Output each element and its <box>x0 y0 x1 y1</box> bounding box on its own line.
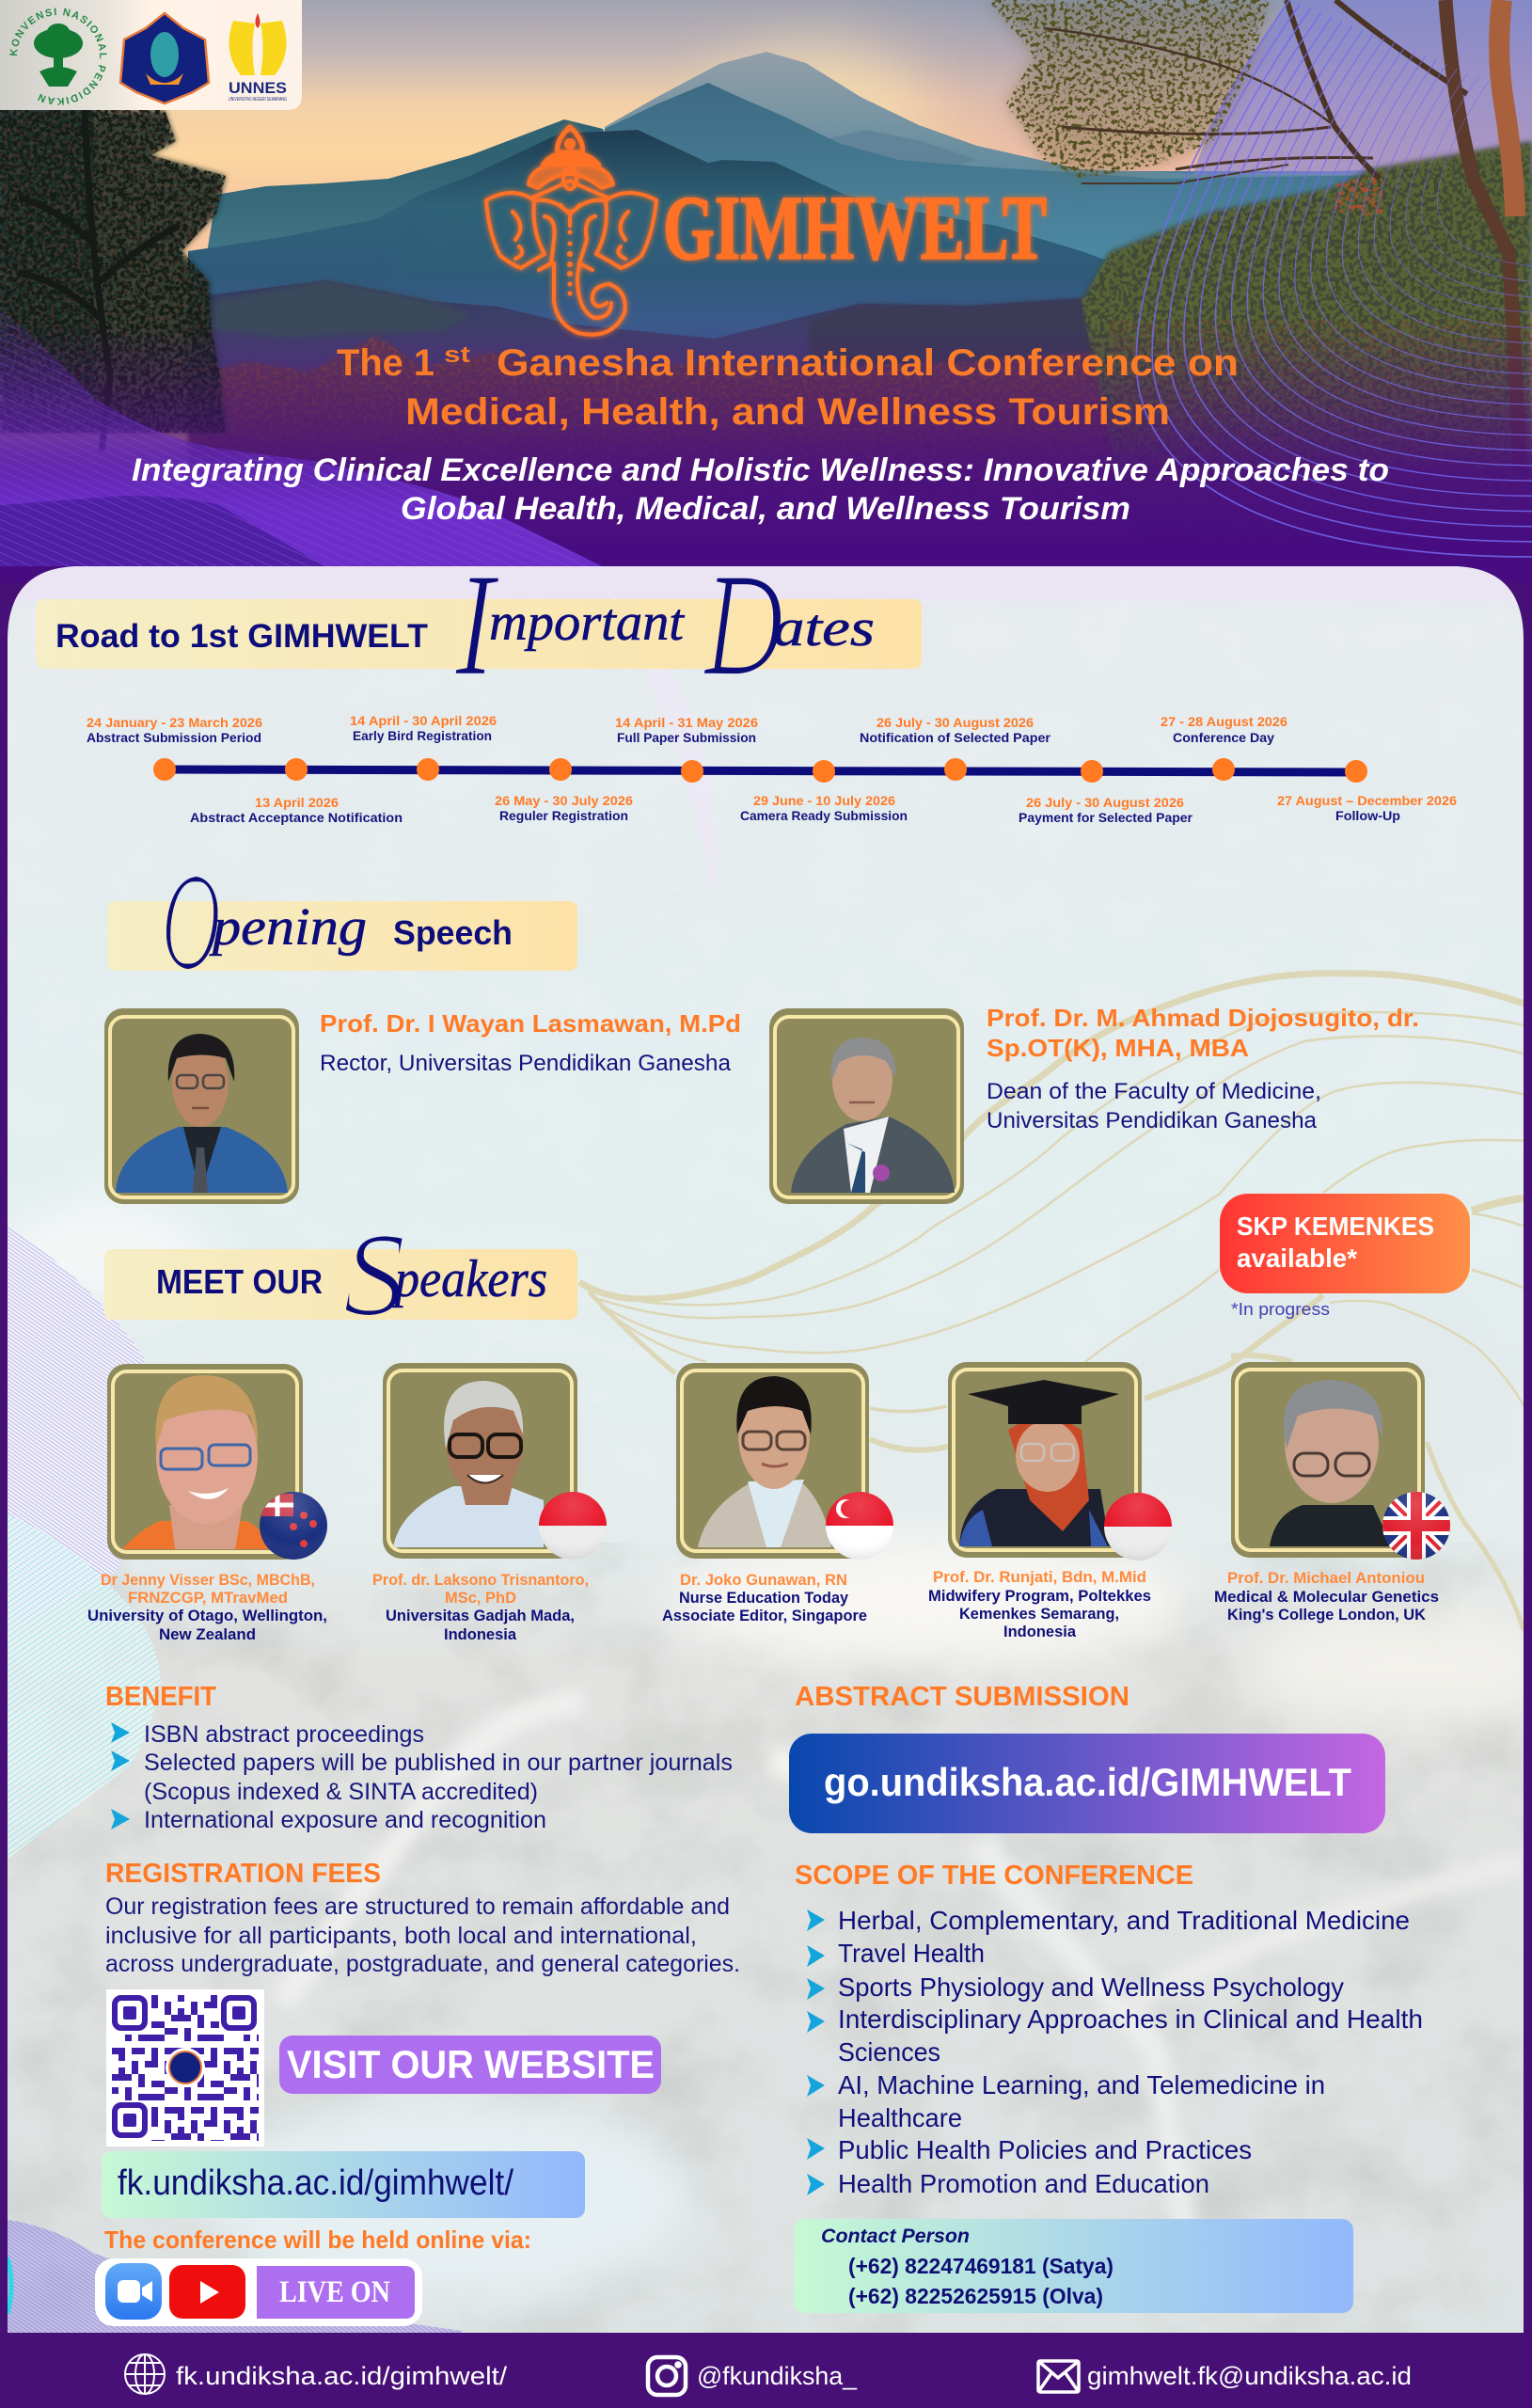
callout: SKP Kemenkes: SKP KEMENKES <box>1237 1212 1434 1241</box>
title: GIMHWELT: GIMHWELT <box>663 178 1047 278</box>
timeline: follow-up: Follow-Up <box>1335 808 1400 823</box>
timeline: follow-up <box>1277 793 1457 823</box>
text: Joko Gunawan: Nurse Education Today <box>679 1590 849 1607</box>
timeline: regular registration: 26 May - 30 July 2026 <box>495 793 633 808</box>
callout: SKP Kemenkes: available* <box>1237 1244 1357 1273</box>
banner: Important Dates heading <box>36 544 922 705</box>
timeline: full paper submission <box>615 715 758 745</box>
text: Michael Antoniou <box>1214 1570 1439 1624</box>
logos panel <box>0 0 302 110</box>
panel: benefit: ISBN abstract proceedings <box>144 1721 424 1748</box>
cyan line wave left <box>8 1514 161 1859</box>
text: Runjati: Kemenkes Semarang, <box>959 1606 1119 1623</box>
timeline: early bird registration <box>350 713 497 743</box>
heading: conference name: Medical, Health, and Wellness Tourism <box>405 391 1170 433</box>
banner: Important Dates heading: mportant <box>489 594 685 652</box>
timeline: abstract submission period <box>87 715 262 745</box>
QR code <box>106 1989 264 2147</box>
timeline: payment for selected paper <box>1019 795 1193 825</box>
banner: Opening Speech heading: pening <box>209 898 367 957</box>
banner: Important Dates heading: ates <box>773 599 875 657</box>
timeline: payment for selected paper: 26 July - 30 August 2026 <box>1026 795 1184 810</box>
icon: Indonesia flag <box>539 1492 607 1560</box>
timeline: abstract acceptance notification: Abstract Acceptance Notification <box>190 810 403 825</box>
banner: Opening Speech heading: O <box>160 845 222 998</box>
panel: benefit: International exposure and recognition <box>144 1807 546 1833</box>
timeline: abstract acceptance notification <box>190 795 403 825</box>
banner: Meet Our Speakers heading <box>104 1211 577 1340</box>
portrait: Jenny Visser with New Zealand flag <box>107 1364 327 1560</box>
timeline: payment for selected paper: Payment for Selected Paper <box>1019 810 1193 825</box>
footer: instagram <box>648 2357 858 2395</box>
timeline: follow-up: 27 August – December 2026 <box>1277 793 1457 808</box>
banner: Important Dates heading: Road to 1st GIMHWELT <box>55 618 428 655</box>
subtitle: conference theme: Integrating Clinical Excellence and Holistic Wellness: Innovative Approaches to <box>132 452 1389 488</box>
panel: scope of the conference: Interdisciplinary Approaches in Clinical and Health <box>838 2004 1423 2034</box>
banner: Meet Our Speakers heading: peakers <box>391 1250 547 1308</box>
pill: abstract submission URL <box>789 1734 1385 1833</box>
purple line wave left <box>8 1289 144 1580</box>
label: live on <box>257 2266 415 2319</box>
timeline: conference day: Conference Day <box>1173 730 1274 745</box>
timeline: camera ready submission: Camera Ready Submission <box>740 808 908 823</box>
panel: scope of the conference: Sciences <box>838 2037 940 2067</box>
subtitle: conference theme: Global Health, Medical, and Wellness Tourism <box>401 491 1130 527</box>
timeline: regular registration: Reguler Registration <box>499 808 628 823</box>
text: Dean name and role: Dean of the Faculty of Medicine, <box>987 1079 1321 1104</box>
footer: website: fk.undiksha.ac.id/gimhwelt/ <box>176 2362 508 2390</box>
icon: instagram <box>648 2357 686 2395</box>
heading: conference name: Ganesha International Conference on <box>497 342 1239 384</box>
right tree <box>1192 0 1532 175</box>
timeline <box>87 713 1457 825</box>
timeline: early bird registration: Early Bird Registration <box>353 728 492 743</box>
panel: scope of the conference: Health Promotion and Education <box>838 2169 1209 2198</box>
bottom-left line wave <box>8 2220 462 2333</box>
banner: Important Dates heading: I <box>453 544 500 705</box>
text: Jenny Visser: Dr Jenny Visser BSc, MBChB, <box>101 1572 315 1589</box>
portrait: Runjati with Indonesia flag <box>948 1362 1172 1560</box>
icon: Zoom <box>105 2263 162 2320</box>
panel: contact person: (+62) 82247469181 (Satya) <box>848 2254 1113 2278</box>
icon: UNNES logo: UNIVERSITAS NEGERI SEMARANG <box>229 97 287 103</box>
icon: Singapore flag <box>826 1492 893 1560</box>
text: Rector name and role: Prof. Dr. I Wayan Lasmawan, M.Pd <box>320 1009 741 1038</box>
panel: contact person <box>794 2219 1353 2313</box>
text: Runjati <box>928 1569 1151 1640</box>
text: Joko Gunawan <box>662 1572 867 1624</box>
aerial photo texture background <box>0 566 1532 2333</box>
text: Runjati: Indonesia <box>1003 1624 1077 1640</box>
banner: Opening Speech heading <box>107 845 577 998</box>
left purple wave <box>0 308 602 566</box>
timeline: notification of selected paper <box>860 715 1051 745</box>
text: Joko Gunawan: Associate Editor, Singapore <box>662 1608 867 1624</box>
banner: Opening Speech heading: Speech <box>393 913 513 952</box>
panel: contact person: (+62) 82252625915 (Olva) <box>848 2284 1103 2308</box>
timeline: conference day: 27 - 28 August 2026 <box>1161 714 1287 729</box>
panel: scope of the conference: AI, Machine Learning, and Telemedicine in <box>838 2070 1325 2099</box>
icon: New Zealand flag <box>260 1492 327 1560</box>
banner: Meet Our Speakers heading: S <box>342 1211 406 1340</box>
panel: scope of the conference <box>795 1861 1423 2198</box>
panel: benefit: (Scopus indexed & SINTA accredited) <box>144 1779 538 1805</box>
panel: benefit: BENEFIT <box>105 1682 216 1712</box>
pill: website URL: fk.undiksha.ac.id/gimhwelt/ <box>118 2163 513 2203</box>
banner: Meet Our Speakers heading: MEET OUR <box>156 1262 323 1301</box>
timeline: full paper submission: Full Paper Submission <box>617 730 756 745</box>
panel: scope of the conference: Public Health Policies and Practices <box>838 2135 1252 2164</box>
icon: UNNES logo <box>229 13 287 103</box>
heading: conference name: The 1 <box>337 342 434 384</box>
icon: national education tree logo: KONVENSI NASIONAL PENDIDIKAN <box>9 8 107 105</box>
subtitle: conference theme <box>132 452 1389 527</box>
text: Dean name and role: Prof. Dr. M. Ahmad Djojosugito, dr. <box>987 1004 1419 1032</box>
footer: instagram: @fkundiksha_ <box>697 2362 858 2390</box>
panel: contact person: Contact Person <box>821 2226 970 2247</box>
timeline: abstract submission period: Abstract Submission Period <box>87 730 261 745</box>
panel: registration fees: across undergraduate, postgraduate, and general categories. <box>105 1951 740 1977</box>
panel: scope of the conference: Herbal, Complementary, and Traditional Medicine <box>838 1906 1410 1935</box>
heading: conference name <box>337 342 1239 433</box>
label: live on: LIVE ON <box>279 2275 390 2309</box>
text: Jenny Visser: FRNZCGP, MTravMed <box>128 1590 288 1607</box>
text: Jenny Visser: University of Otago, Wellington, <box>87 1608 327 1624</box>
text: Dean name and role <box>987 1004 1419 1133</box>
panel: benefit: Selected papers will be published in our partner journals <box>144 1750 733 1776</box>
icon: YouTube <box>169 2265 245 2319</box>
icon: bullet arrows <box>807 1909 825 2195</box>
panel: registration fees: Our registration fees are structured to remain affordable and <box>105 1893 730 1920</box>
panel: live platforms <box>95 2258 422 2326</box>
text: Laksono Trisnantoro: Prof. dr. Laksono Trisnantoro, <box>372 1572 589 1589</box>
text: Jenny Visser: New Zealand <box>159 1626 256 1643</box>
panel: scope of the conference: SCOPE OF THE CONFERENCE <box>795 1861 1193 1891</box>
footer bar background <box>0 2333 1532 2408</box>
text: Michael Antoniou: Medical & Molecular Genetics <box>1214 1589 1439 1606</box>
panel: registration fees <box>105 1859 740 1977</box>
text: Laksono Trisnantoro: Indonesia <box>444 1626 517 1643</box>
button: visit our website: VISIT OUR WEBSITE <box>287 2042 655 2086</box>
portrait: Laksono Trisnantoro with Indonesia flag <box>383 1363 607 1560</box>
icon: globe <box>125 2354 165 2394</box>
timeline: full paper submission: 14 April - 31 May 2026 <box>615 715 758 730</box>
icon: UK flag <box>1382 1492 1450 1560</box>
text: Runjati: Prof. Dr. Runjati, Bdn, M.Mid <box>933 1569 1146 1586</box>
icon: bullet arrows <box>111 1722 130 1830</box>
gold ribbon curves <box>579 974 1532 1630</box>
panel: main content card <box>0 566 1532 2333</box>
panel: scope of the conference: Healthcare <box>838 2103 962 2132</box>
text: Rector name and role <box>320 1009 741 1076</box>
text: Runjati: Midwifery Program, Poltekkes <box>928 1588 1151 1605</box>
portrait: Joko Gunawan with Singapore flag <box>676 1363 893 1560</box>
icon: Ganesha logo <box>486 127 656 335</box>
text: Jenny Visser <box>87 1572 327 1643</box>
pill: abstract submission URL: go.undiksha.ac.id/GIMHWELT <box>824 1760 1351 1804</box>
left tree <box>0 110 94 395</box>
callout: SKP Kemenkes <box>1220 1194 1470 1293</box>
timeline: camera ready submission: 29 June - 10 July 2026 <box>753 793 895 808</box>
note: in progress: *In progress <box>1231 1300 1330 1319</box>
heading: abstract submission: ABSTRACT SUBMISSION <box>795 1682 1129 1712</box>
timeline: abstract acceptance notification: 13 April 2026 <box>255 795 339 810</box>
timeline: camera ready submission <box>740 793 908 823</box>
hero background: mountain landscape <box>0 0 1532 583</box>
text: Dean name and role: Universitas Pendidikan Ganesha <box>987 1108 1318 1133</box>
portrait: Dean <box>769 1008 964 1204</box>
footer: website <box>125 2354 508 2394</box>
panel: registration fees: inclusive for all participants, both local and international, <box>105 1923 697 1949</box>
timeline: conference day <box>1161 714 1287 745</box>
text: Joko Gunawan: Dr. Joko Gunawan, RN <box>680 1572 847 1589</box>
timeline: notification of selected paper: Notification of Selected Paper <box>860 730 1051 745</box>
text: Laksono Trisnantoro: Universitas Gadjah Mada, <box>386 1608 575 1624</box>
icon: UNNES logo: UNNES <box>229 79 287 97</box>
timeline: notification of selected paper: 26 July - 30 August 2026 <box>877 715 1034 730</box>
heading: conference name: st <box>444 342 470 368</box>
timeline: early bird registration: 14 April - 30 April 2026 <box>350 713 497 728</box>
panel: scope of the conference: Sports Physiology and Wellness Psychology <box>838 1972 1344 2002</box>
timeline: regular registration <box>495 793 633 823</box>
icon: Undiksha shield logo <box>120 13 209 103</box>
text: Rector name and role: Rector, Universitas Pendidikan Ganesha <box>320 1051 732 1076</box>
panel: scope of the conference: Travel Health <box>838 1939 985 1968</box>
panel: benefit <box>105 1682 733 1833</box>
banner: Important Dates heading: D <box>702 544 784 705</box>
panel: registration fees: REGISTRATION FEES <box>105 1859 381 1889</box>
text: online via: The conference will be held online via: <box>104 2226 531 2254</box>
text: Michael Antoniou: Prof. Dr. Michael Antoniou <box>1227 1570 1425 1587</box>
footer: email: gimhwelt.fk@undiksha.ac.id <box>1087 2362 1412 2390</box>
portrait: Michael Antoniou with UK flag <box>1231 1362 1450 1560</box>
text: Laksono Trisnantoro <box>372 1572 589 1643</box>
right concentric line wave <box>1136 0 1532 557</box>
icon: Indonesia flag <box>1104 1493 1172 1560</box>
pill: website URL <box>102 2151 585 2218</box>
timeline: abstract submission period: 24 January - 23 March 2026 <box>87 715 262 730</box>
text: Dean name and role: Sp.OT(K), MHA, MBA <box>987 1034 1249 1062</box>
text: Michael Antoniou: King's College London, UK <box>1227 1607 1426 1624</box>
text: Laksono Trisnantoro: MSc, PhD <box>445 1590 516 1607</box>
portrait: Rector <box>104 1008 299 1204</box>
icon: envelope <box>1038 2361 1079 2392</box>
